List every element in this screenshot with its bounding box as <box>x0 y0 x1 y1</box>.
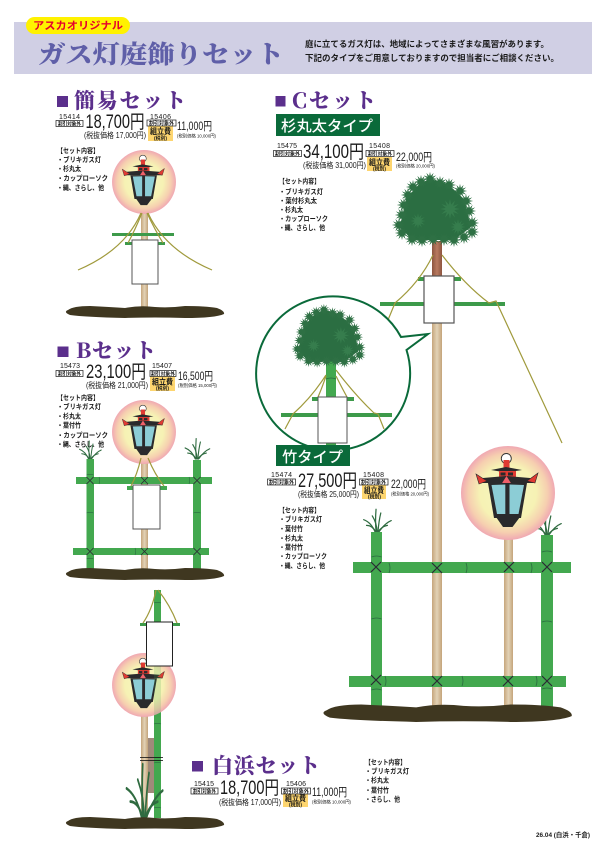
price block: Shirahama set: 組立費 <box>285 793 306 803</box>
price block: simple set: 割引対象外 <box>149 120 174 127</box>
price block: simple set: 組立費 <box>150 126 171 136</box>
price block: simple set: (税別) <box>154 135 167 142</box>
set contents list: Shirahama set <box>365 758 409 804</box>
price block: cedar type: 22,000円 <box>396 152 432 164</box>
set contents list: cedar type: ・カップローソク <box>279 214 328 223</box>
price block: B set: 割引対象外 <box>58 370 81 378</box>
price block: cedar type: 34,100円 <box>303 142 364 163</box>
set contents list: bamboo type: 【セット内容】 <box>279 506 320 514</box>
set contents list: cedar type: ・杉丸太 <box>279 205 303 214</box>
set contents list: bamboo type: ・葉付竹 <box>279 542 303 552</box>
price block: B set <box>56 362 217 392</box>
price block: B set: 16,500円 <box>178 371 213 383</box>
price block: cedar type: 15475 <box>277 143 297 150</box>
callout: bamboo type closeup <box>256 296 428 450</box>
price block: B set: (税別価格 15,000円) <box>178 382 217 389</box>
price block: bamboo type: 組立費 <box>364 485 384 495</box>
price block: cedar type <box>274 142 435 172</box>
set contents list: cedar type <box>279 176 328 232</box>
set contents list: bamboo type: ・葉付竹 <box>279 524 303 533</box>
price block: simple set <box>56 112 216 142</box>
intro text <box>305 39 559 63</box>
price block: simple set: 割引対象外 <box>58 120 81 128</box>
price block: Shirahama set: (税別価格 10,000円) <box>312 798 351 806</box>
set contents list: ・縄、さらし、他 <box>57 183 104 192</box>
price block: B set: 組立費 <box>152 376 173 386</box>
set contents list <box>57 146 108 192</box>
illustration: simple lantern set <box>66 150 224 318</box>
set contents list: ・ブリキガス灯 <box>57 155 101 164</box>
set contents list: ・カップローソク <box>57 430 108 440</box>
price block: bamboo type: 15408 <box>363 472 384 479</box>
label: cedar log type: 杉丸太タイプ <box>281 118 373 135</box>
set contents list: bamboo type: ・ブリキガス灯 <box>279 514 322 524</box>
price block: bamboo type: (税抜価格 25,000円) <box>298 489 359 499</box>
price block: bamboo type: 22,000円 <box>391 479 426 491</box>
set contents list: bamboo type: ・杉丸太 <box>279 534 303 542</box>
set contents list: cedar type: ・縄、さらし、他 <box>279 223 325 232</box>
price block: cedar type: 組立費 <box>369 157 390 167</box>
price block: bamboo type: 15474 <box>271 472 292 479</box>
price block: Shirahama set <box>191 778 351 808</box>
price block: simple set: 15414 <box>59 114 80 121</box>
price block: simple set: 18,700円 <box>86 112 144 133</box>
price block: B set: (税抜価格 21,000円) <box>86 380 148 390</box>
set contents list: Shirahama set: 【セット内容】 <box>365 758 406 766</box>
price block: bamboo type <box>268 471 429 500</box>
price block: cedar type: 割引対象外 <box>275 150 300 158</box>
price block: cedar type: 15408 <box>369 143 390 150</box>
set contents list: Shirahama set: ・葉付竹 <box>365 786 389 794</box>
set contents list: 【セット内容】 <box>57 146 99 155</box>
panel: simple set <box>56 85 224 318</box>
badge: asuka original: アスカオリジナル <box>33 20 124 32</box>
set contents list: cedar type: ・ブリキガス灯 <box>279 187 323 196</box>
intro text: 庭に立てるガス灯は、地域によってさまざまな風習があります。 <box>305 39 549 49</box>
set contents list <box>57 393 108 448</box>
heading: simple set: 簡易セット <box>74 85 186 115</box>
price block: Shirahama set: 18,700円 <box>220 778 279 799</box>
price block: Shirahama set: 割引対象外 <box>193 788 216 795</box>
price block: Shirahama set: 割引対象外 <box>283 788 309 795</box>
set contents list: bamboo type: ・縄、さらし、他 <box>279 561 325 570</box>
footer code: 26.04 (白浜・千倉) <box>536 830 590 839</box>
header band <box>14 17 592 74</box>
price block: simple set: 15406 <box>150 114 171 121</box>
illustration: large bamboo fence and lantern <box>323 446 572 722</box>
label: cedar log type <box>276 114 380 136</box>
heading: Shirahama set: 白浜セット <box>212 750 320 780</box>
set contents list: Shirahama set: ・ブリキガス灯 <box>365 766 409 776</box>
panel: Shirahama set illustration <box>66 590 224 829</box>
badge: asuka original <box>26 17 130 34</box>
illustration: cedar tree pole with sign <box>380 172 562 707</box>
price block: cedar type: 割引対象外 <box>368 150 392 158</box>
price block: cedar type: (税別価格 20,000円) <box>396 162 435 170</box>
price block: Shirahama set: 15406 <box>286 781 306 788</box>
price block: bamboo type: (税別価格 20,000円) <box>391 490 429 498</box>
price block: simple set: (税別価格 10,000円) <box>177 132 216 140</box>
price block: bamboo type: 27,500円 <box>298 471 357 492</box>
set contents list: ・杉丸太 <box>57 412 81 420</box>
price block: Shirahama set: (税抜価格 17,000円) <box>219 797 281 807</box>
price block: bamboo type: 割引対象外 <box>361 479 386 486</box>
label: bamboo type <box>276 445 350 466</box>
intro text: 下記のタイプをご用意しておりますので担当者にご相談ください。 <box>305 53 559 63</box>
price block: B set: 15473 <box>60 363 80 370</box>
title: ガス灯庭飾りセット <box>38 35 284 71</box>
price block: B set: 15407 <box>152 363 172 370</box>
set contents list: ・カップローソク <box>57 174 108 182</box>
set contents list: Shirahama set: ・さらし、他 <box>365 794 400 804</box>
heading: B set: Bセット <box>76 335 156 365</box>
price block: Shirahama set: 11,000円 <box>312 787 347 799</box>
price block: simple set: (税抜価格 17,000円) <box>84 130 146 140</box>
price block: cedar type: (税抜価格 31,000円) <box>303 160 366 170</box>
heading: C set: Cセット <box>292 85 376 115</box>
set contents list: bamboo type <box>279 506 327 570</box>
price block: Shirahama set: 15415 <box>194 781 214 788</box>
illustration: B set fence and lantern <box>66 400 224 580</box>
set contents list: ・縄、さらし、他 <box>57 440 104 448</box>
price block: simple set: 11,000円 <box>177 121 212 133</box>
price block: bamboo type: (税別) <box>368 494 381 500</box>
set contents list: ・ブリキガス灯 <box>57 402 101 411</box>
set contents list: cedar type: 【セット内容】 <box>279 176 320 186</box>
price block: B set: 23,100円 <box>86 362 146 383</box>
price block: B set: (税別) <box>156 385 169 392</box>
set contents list: bamboo type: ・カップローソク <box>279 552 327 560</box>
set contents list: cedar type: ・葉付杉丸太 <box>279 196 317 205</box>
label: bamboo type: 竹タイプ <box>282 449 343 466</box>
price block: B set: 割引対象外 <box>151 370 175 378</box>
panel: B set <box>56 335 224 580</box>
panel: C set <box>256 85 572 722</box>
price block: bamboo type: 割引対象外 <box>269 479 294 486</box>
set contents list: 【セット内容】 <box>57 393 99 402</box>
price block: Shirahama set: (税別) <box>289 802 302 808</box>
set contents list: Shirahama set: ・杉丸太 <box>365 776 389 784</box>
panel: Shirahama set text <box>191 750 409 808</box>
set contents list: ・杉丸太 <box>57 164 81 173</box>
set contents list: ・葉付竹 <box>57 420 81 430</box>
price block: cedar type: (税別) <box>373 166 386 172</box>
